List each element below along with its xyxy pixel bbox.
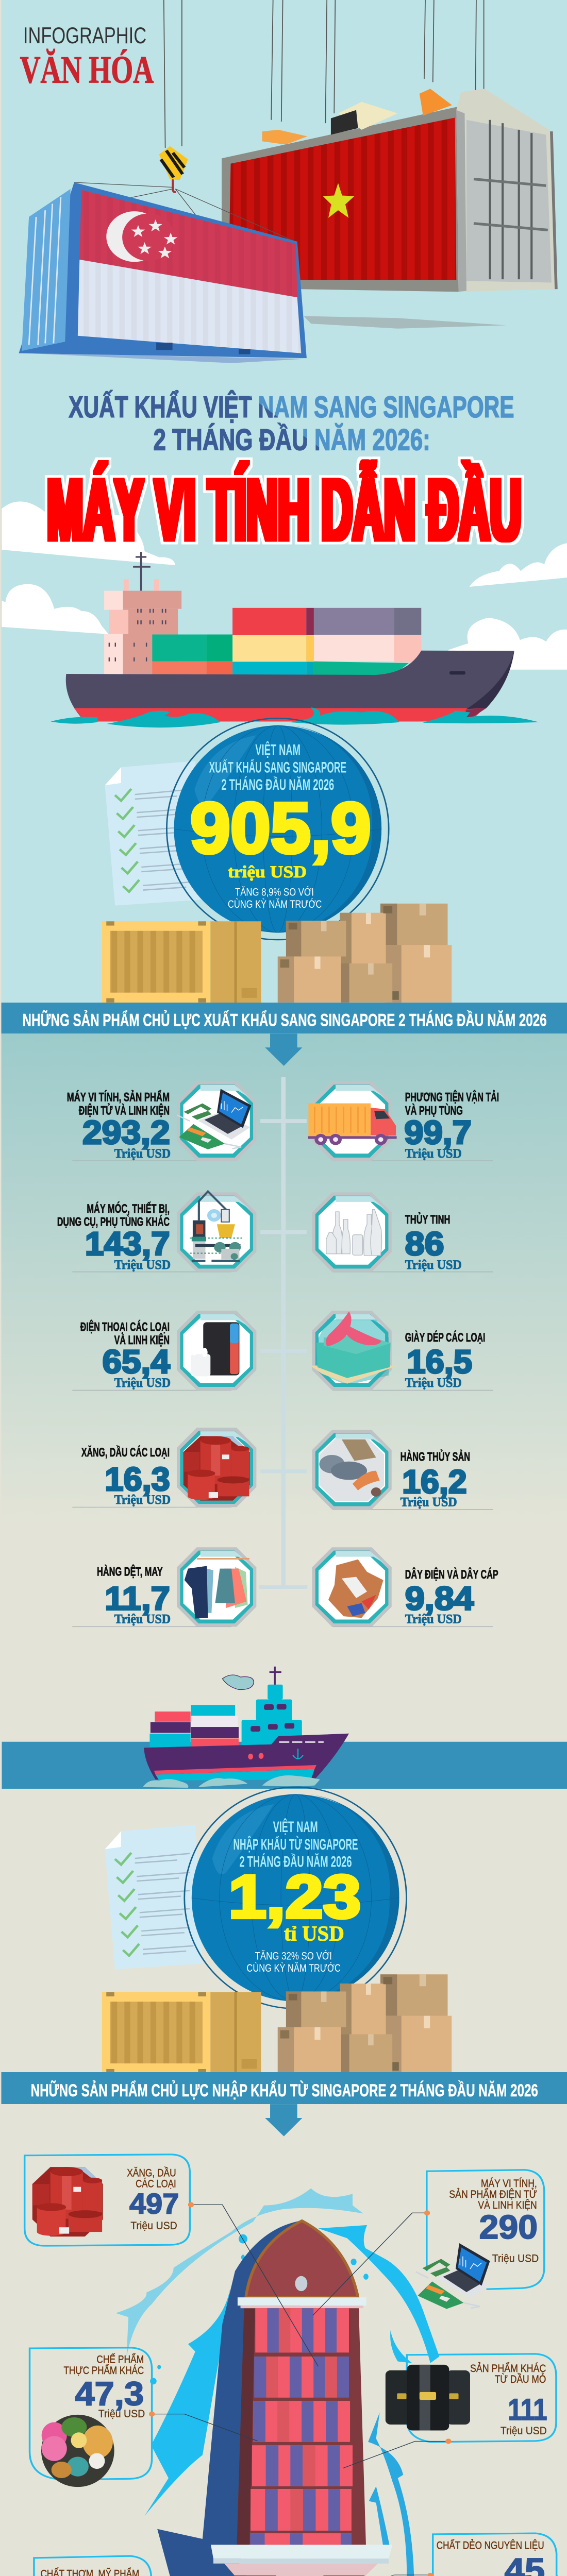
item: fuel: XĂNG, DẦU CÁC LOẠI [81, 1446, 170, 1460]
item: glass [312, 1192, 462, 1272]
banner: import products [1, 2072, 567, 2104]
purple ship [143, 1667, 349, 1788]
callout: food: CHẾ PHẨM [96, 2353, 144, 2365]
callout: petroleum products: TỪ DẦU MỎ [495, 2373, 546, 2385]
stat: import total: TĂNG 32% SO VỚI [255, 1950, 332, 1962]
item: seafood [312, 1430, 470, 1510]
ship shadow [157, 2221, 300, 2576]
import products upper [25, 2104, 557, 2576]
item: vehicles: 99,7 [404, 1114, 472, 1151]
item: phones: ĐIỆN THOẠI CÁC LOẠI [80, 1320, 170, 1334]
vertical timeline [281, 1077, 286, 1587]
item: textiles [97, 1547, 256, 1627]
stat: export total: 905,9 [190, 788, 371, 868]
globe [166, 718, 389, 940]
callout: plastics [325, 2573, 557, 2576]
ship hull lower [228, 2575, 371, 2576]
callout: food [30, 2348, 257, 2487]
ship hull top [211, 2221, 392, 2576]
callout: fuel: 497 [129, 2188, 179, 2220]
import products lower [34, 2573, 557, 2576]
callout: computers: Triệu USD [492, 2251, 539, 2264]
item: vehicles: Triệu USD [405, 1146, 462, 1161]
item: footwear: Triệu USD [405, 1375, 462, 1390]
item: textiles: HÀNG DỆT, MAY [97, 1565, 163, 1579]
item: machinery: Triệu USD [114, 1257, 171, 1272]
stat: export total: CÙNG KỲ NĂM TRƯỚC [228, 897, 322, 910]
headline: 2 THÁNG ĐẦU NĂM 2026: [153, 423, 430, 456]
water lower [155, 2575, 414, 2576]
callout: cosmetics top [34, 2556, 151, 2576]
item: fuel: Triệu USD [114, 1492, 171, 1507]
ship shadow lower [175, 2575, 249, 2576]
callout: petroleum products: 111 [508, 2393, 547, 2427]
Singapore flag container [19, 182, 307, 363]
item: vehicles: PHƯƠNG TIỆN VẬN TẢI [405, 1090, 499, 1104]
callout: cosmetics [34, 2575, 239, 2576]
item: computers: ĐIỆN TỬ VÀ LINH KIỆN [79, 1103, 170, 1117]
stat: import total: NHẬP KHẨU TỪ SINGAPORE [233, 1835, 358, 1853]
item: computers: MÁY VI TÍNH, SẢN PHẨM [67, 1090, 170, 1104]
item: vehicles [308, 1081, 499, 1161]
container and boxes [102, 904, 452, 1004]
item: fuel: 16,3 [105, 1461, 170, 1498]
item: machinery: DỤNG CỤ, PHỤ TÙNG KHÁC [57, 1215, 170, 1229]
export section [51, 552, 539, 1004]
item: glass: 86 [405, 1226, 444, 1262]
stat: import total: tỉ USD [284, 1922, 344, 1945]
item: footwear: GIÀY DÉP CÁC LOẠI [405, 1331, 485, 1345]
item: computers: 293,2 [82, 1114, 170, 1151]
item: textiles: Triệu USD [114, 1612, 171, 1626]
arrow [265, 1033, 302, 1066]
callout: computers: MÁY VI TÍNH, [481, 2177, 537, 2190]
item: fuel [81, 1428, 256, 1507]
callout: computers [313, 2170, 544, 2315]
item: phones [80, 1311, 256, 1390]
globe [185, 1787, 407, 2009]
stat: export total: TĂNG 8,9% SO VỚI [235, 886, 314, 898]
cargo ship [66, 552, 514, 722]
item: cables [312, 1547, 498, 1627]
callout: petroleum products: Triệu USD [501, 2424, 547, 2437]
stat: import total [228, 1818, 361, 1974]
stat: export total: triệu USD [228, 862, 307, 881]
page background top [0, 0, 567, 1004]
left edge strip [0, 0, 1, 2576]
item: cables: DÂY ĐIỆN VÀ DÂY CÁP [405, 1568, 498, 1581]
stat: export total: VIỆT NAM [255, 741, 301, 758]
Vietnam flag container [222, 89, 556, 292]
logo: INFOGRAPHIC [23, 23, 146, 48]
item: computers: Triệu USD [114, 1146, 171, 1161]
item: phones: 65,4 [103, 1344, 170, 1380]
item: textiles: 11,7 [105, 1580, 170, 1617]
banner: export products [1, 1003, 567, 1033]
stat: import total: CÙNG KỲ NĂM TRƯỚC [246, 1961, 341, 1974]
callout: computers: VÀ LINH KIỆN [478, 2199, 537, 2211]
page background gradient [0, 1033, 567, 1525]
page background lower [0, 1525, 567, 2576]
item: cables: Triệu USD [405, 1612, 462, 1626]
callout: food: THỰC PHẨM KHÁC [63, 2364, 144, 2377]
underlines [72, 1161, 493, 1510]
stat: import total: VIỆT NAM [273, 1818, 318, 1836]
item: seafood: 16,2 [402, 1464, 467, 1500]
item: computers [67, 1081, 256, 1161]
stat: export total [190, 741, 371, 910]
item: machinery [57, 1192, 256, 1272]
container shadow [304, 316, 506, 329]
callout: fuel: CÁC LOẠI [136, 2178, 176, 2190]
item: footwear: 16,5 [407, 1344, 472, 1380]
item: seafood: HÀNG THỦY SẢN [401, 1450, 470, 1464]
stat: import total: 2 THÁNG ĐẦU NĂM 2026 [239, 1853, 352, 1870]
callout: petroleum products [343, 2354, 556, 2468]
callout: food: Triệu USD [98, 2407, 145, 2420]
callout: plastics top [433, 2533, 557, 2576]
hero section [19, 0, 556, 560]
waves [51, 707, 539, 727]
export products list [57, 1033, 499, 1510]
water splash [115, 2188, 439, 2576]
checklist [105, 1825, 203, 1970]
callout: computers: SẢN PHẨM ĐIỆN TỬ [449, 2188, 537, 2200]
clouds [2, 501, 567, 670]
crane cables [164, 0, 484, 148]
item: cables: 9,84 [405, 1580, 474, 1617]
checklist [105, 761, 203, 906]
stat: export total: XUẤT KHẨU SANG SINGAPORE [209, 759, 346, 776]
item: phones: Triệu USD [114, 1375, 171, 1390]
logo [20, 23, 154, 92]
item: glass: THỦY TINH [405, 1212, 450, 1227]
callout: fuel [25, 2155, 318, 2366]
stat: import total: 1,23 [228, 1863, 361, 1931]
import section [2, 1547, 567, 2074]
item: vehicles: VÀ PHỤ TÙNG [405, 1104, 463, 1117]
headline [69, 391, 514, 456]
logo: VĂN HÓA [20, 49, 154, 92]
callout: fuel: Triệu USD [130, 2219, 177, 2232]
sea band [2, 1742, 567, 1789]
item: footwear [310, 1311, 485, 1390]
item: glass: Triệu USD [405, 1257, 462, 1272]
timeline branch [259, 1585, 307, 1589]
callout: computers: 290 [479, 2209, 538, 2246]
arrow [265, 2104, 302, 2137]
hook [159, 146, 188, 192]
item: phones: VÀ LINH KIỆN [114, 1333, 170, 1347]
callout: fuel: XĂNG, DẦU [127, 2166, 176, 2179]
item: machinery: 143,7 [85, 1226, 170, 1262]
item: seafood: Triệu USD [401, 1495, 457, 1509]
timeline branches [260, 1119, 307, 1473]
callout: petroleum products: SẢN PHẨM KHÁC [470, 2362, 546, 2375]
callout: food: 47,3 [75, 2375, 144, 2413]
container and boxes [102, 1974, 452, 2074]
stat: export total: 2 THÁNG ĐẦU NĂM 2026 [221, 776, 334, 793]
item: machinery: MÁY MÓC, THIẾT BỊ, [87, 1202, 170, 1216]
underlines [72, 1626, 493, 1628]
